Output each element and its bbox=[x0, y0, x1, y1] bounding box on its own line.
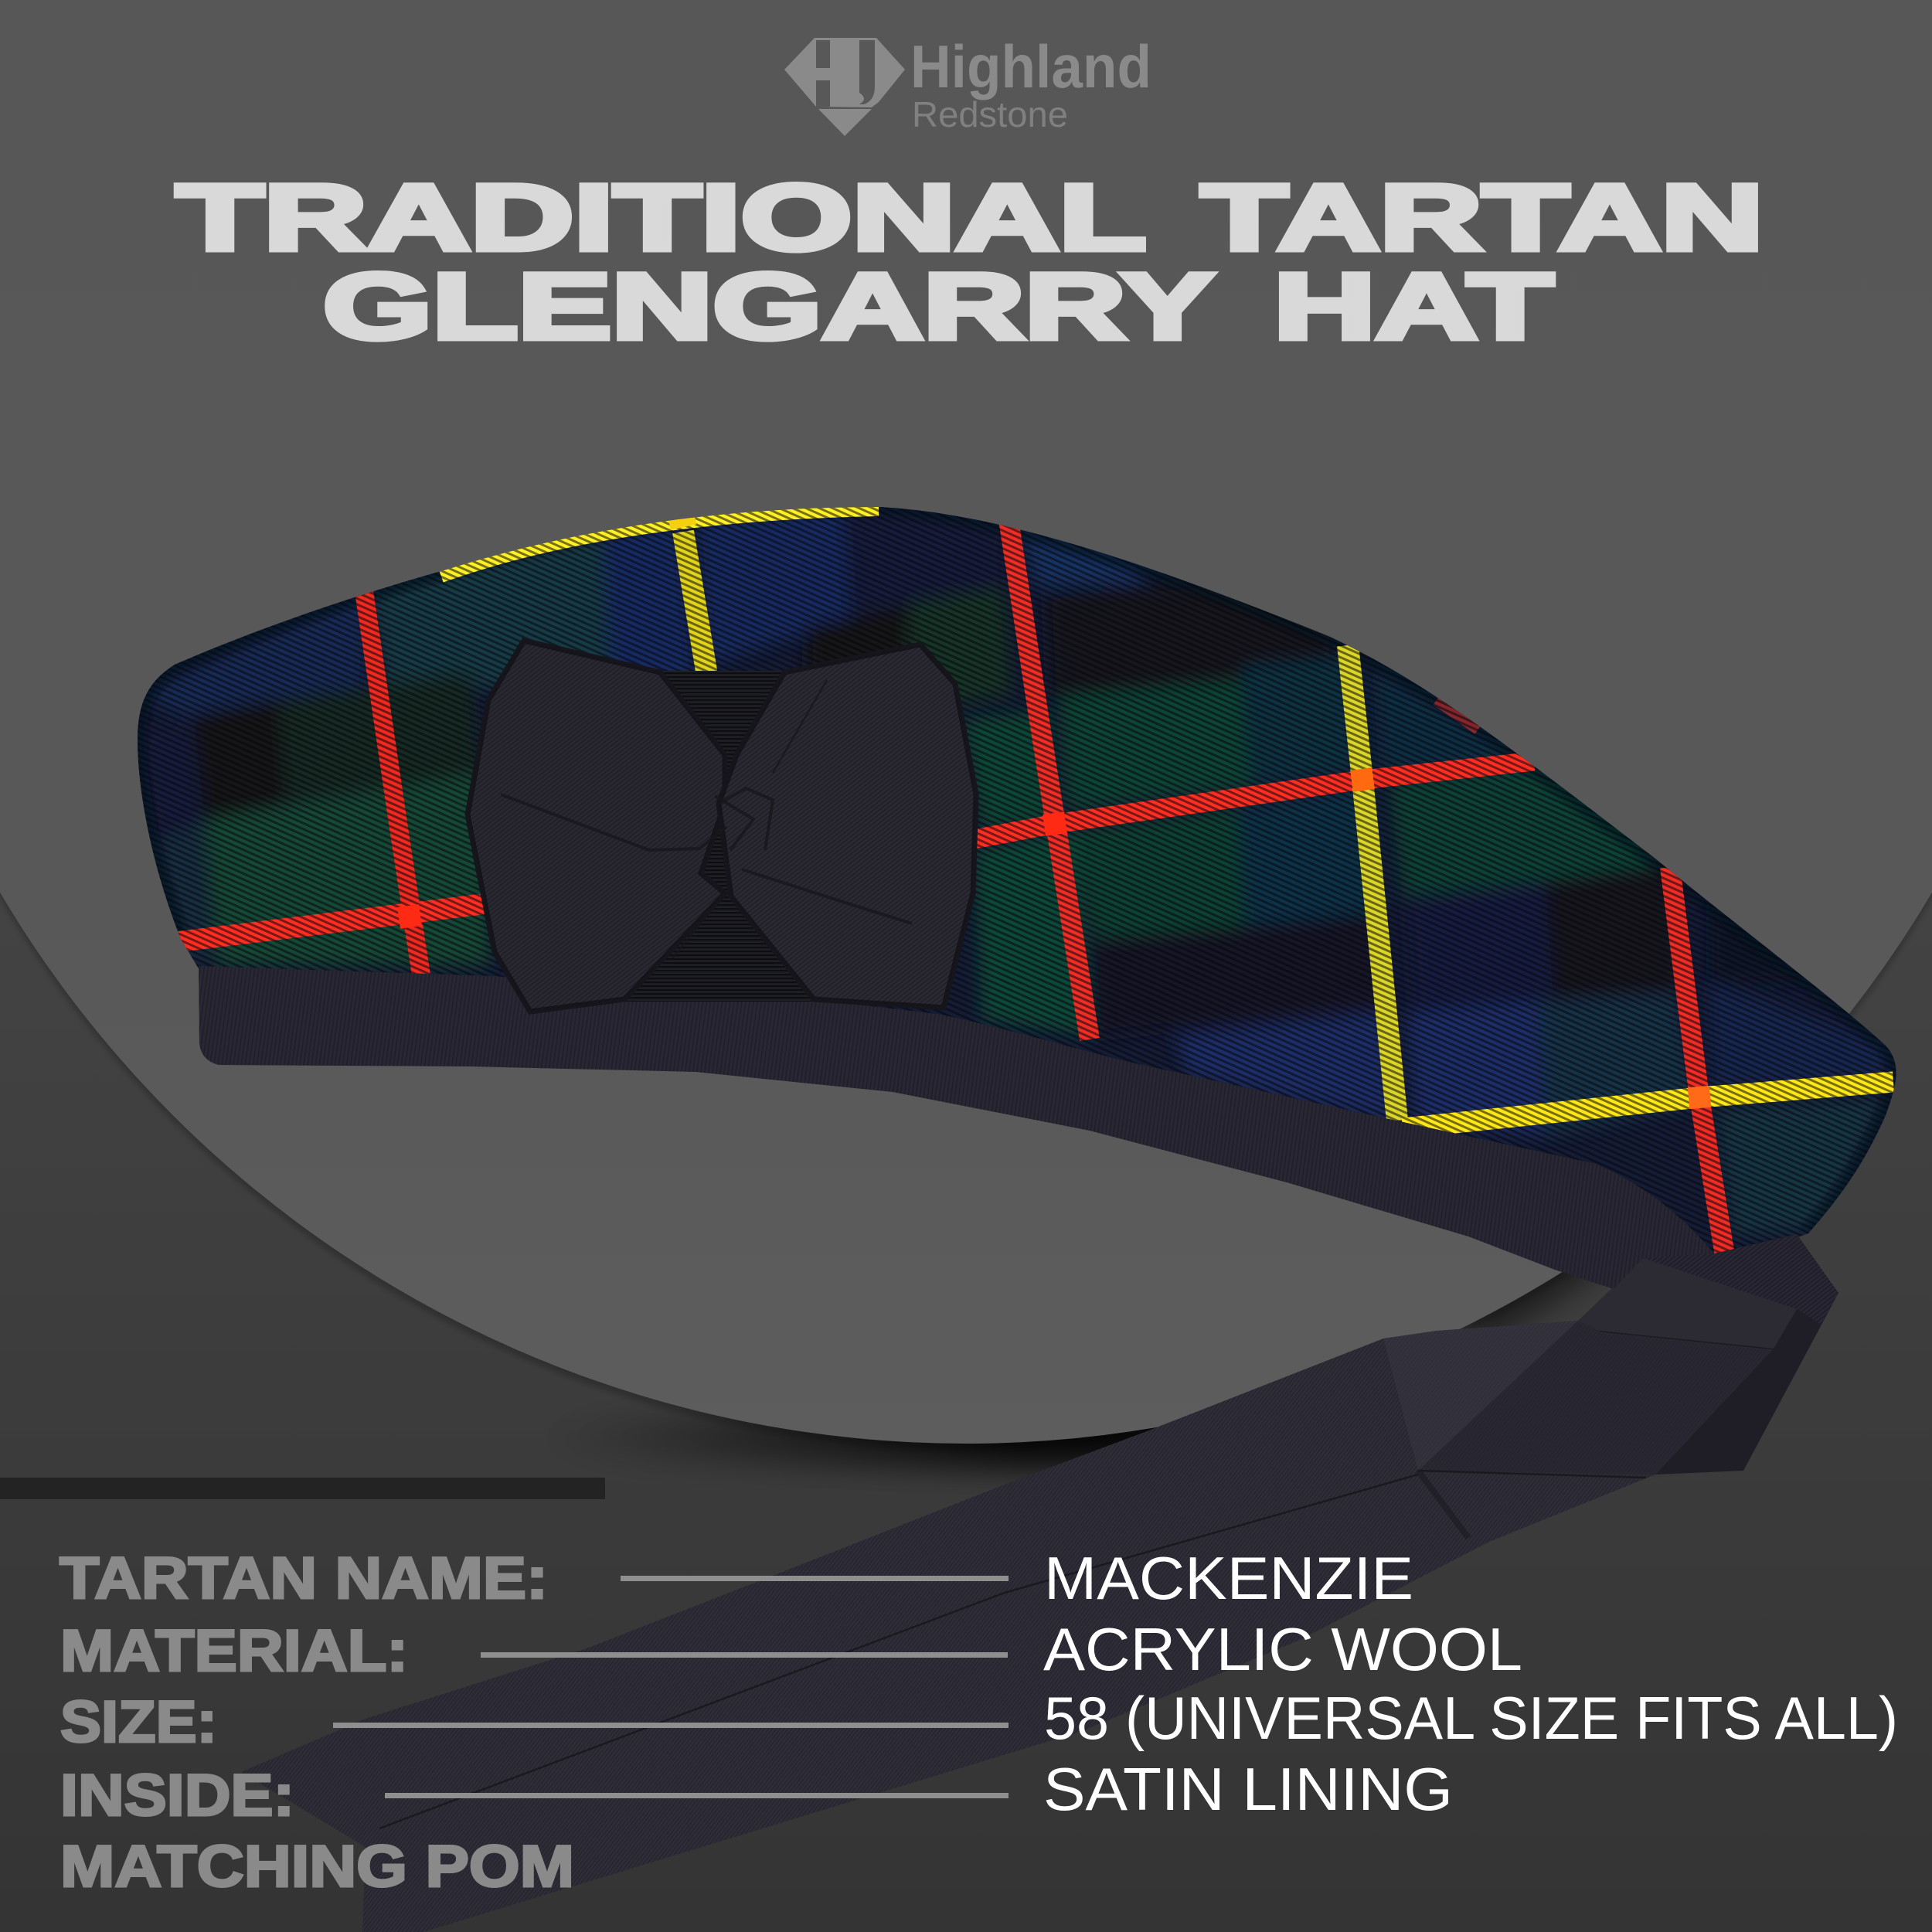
red vertical stripe left bbox=[364, 591, 421, 975]
bow left wing bbox=[468, 641, 725, 1012]
tartan colour blocks bbox=[138, 502, 1893, 1236]
title line 2: GLENGARRY bbox=[323, 253, 1213, 359]
ribbon seams bbox=[379, 1331, 1774, 1828]
yellow vertical stripe bbox=[683, 532, 708, 680]
bow centre band bbox=[624, 671, 814, 1002]
label: tartan name: TARTAN NAME: bbox=[60, 1546, 548, 1611]
red horizontal stripe centre bbox=[974, 761, 1534, 839]
logo diamond emblem bbox=[784, 38, 905, 136]
title line 1: TARTAN bbox=[1201, 165, 1764, 270]
yellow horizontal stripe right bbox=[1403, 1082, 1893, 1128]
stripe crossings bbox=[397, 514, 1711, 1109]
ribbon fold bbox=[1383, 1321, 1578, 1471]
back ribbon piece bbox=[1655, 1293, 1838, 1475]
hat tails ribbon bbox=[241, 1258, 1838, 1932]
spec bar bbox=[0, 1478, 605, 1499]
large circle backdrop bbox=[0, 0, 1932, 1444]
front ribbon knot bbox=[1578, 1258, 1797, 1349]
brim band bbox=[199, 966, 1838, 1325]
circle shadow bbox=[0, 0, 1932, 1468]
spec values bbox=[1043, 1544, 1898, 1823]
twill weave overlay bbox=[116, 495, 1909, 1267]
value: acrylic wool: ACRYLIC WOOL bbox=[1043, 1615, 1522, 1683]
label: size: SIZE: bbox=[60, 1689, 217, 1755]
tartan stripes bbox=[176, 510, 1893, 1256]
bow right wing bbox=[719, 645, 976, 1008]
bow knot and folds bbox=[501, 680, 912, 958]
label: material: MATERIAL: bbox=[60, 1618, 408, 1684]
title bbox=[176, 165, 1764, 359]
value: satin lining: SATIN LINING bbox=[1043, 1755, 1453, 1823]
crown edge shading bbox=[138, 507, 1896, 1233]
main ribbon tail bbox=[241, 1258, 1797, 1932]
bow bbox=[468, 641, 976, 1012]
red horizontal stripe left bbox=[176, 903, 495, 942]
yellow vertical stripe right bbox=[1348, 645, 1397, 1121]
label: inside: INSIDE: bbox=[60, 1763, 294, 1828]
title line 2: HAT bbox=[1274, 253, 1553, 359]
title line 1: TRADITIONAL bbox=[176, 165, 1144, 270]
small red edge stripe bbox=[1436, 701, 1478, 730]
value: mackenzie: MACKENZIE bbox=[1044, 1544, 1413, 1612]
logo wordmark Redstone: Redstone bbox=[912, 94, 1068, 134]
value: size: 58 (UNIVERSAL SIZE FITS ALL) bbox=[1044, 1684, 1898, 1752]
tartan crown bbox=[116, 495, 1909, 1267]
yellow top edge stripe bbox=[441, 510, 879, 577]
label: matching pom: MATCHING POM bbox=[60, 1834, 574, 1900]
logo wordmark Highland: Highland bbox=[910, 32, 1151, 100]
spec labels bbox=[60, 1546, 574, 1900]
connector lines bbox=[333, 1576, 1009, 1798]
logo bbox=[784, 32, 1151, 136]
red vertical stripe right bbox=[1670, 867, 1725, 1256]
red vertical stripe centre bbox=[1009, 519, 1090, 1039]
hat bbox=[116, 495, 1909, 1349]
